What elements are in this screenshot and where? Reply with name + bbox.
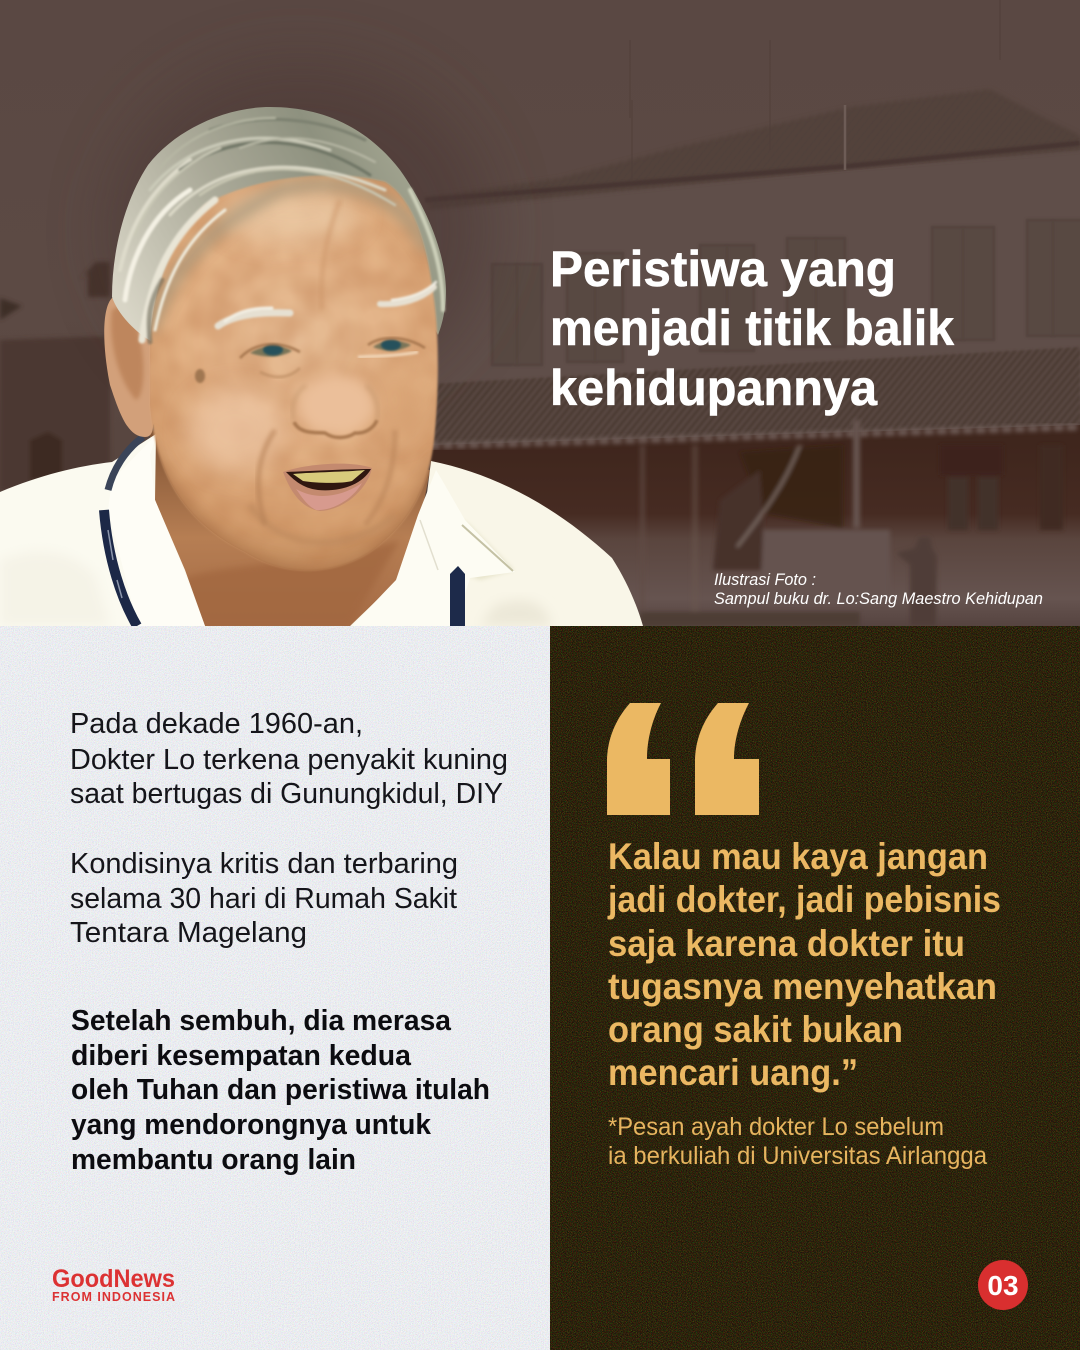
left distant building: [0, 262, 110, 500]
building roof: [425, 89, 1080, 210]
text block: bold conclusion: oleh Tuhan dan peristiwa itulah: [71, 1074, 490, 1106]
quote text: mencari uang.”: [608, 1052, 858, 1093]
quote attribution: ia berkuliah di Universitas Airlangga: [608, 1142, 987, 1170]
mouth: [283, 464, 372, 511]
logo: GoodNews from Indonesia: [52, 1265, 175, 1304]
quote text: tugasnya menyehatkan: [608, 966, 997, 1007]
title: Peristiwa yang: [550, 241, 896, 297]
shirt left: [0, 434, 205, 626]
shirt right: [350, 461, 643, 626]
title: menjadi titik balik: [550, 300, 954, 356]
nose: [293, 375, 378, 438]
text block: first paragraph: Pada dekade 1960-an,: [70, 708, 363, 740]
title: [550, 241, 954, 416]
text block: bold conclusion: diberi kesempatan kedua: [71, 1040, 412, 1072]
tile band: [430, 347, 1080, 445]
hair: [112, 107, 446, 350]
text block: second paragraph: Tentara Magelang: [70, 917, 307, 949]
quote text: saja karena dokter itu: [608, 923, 965, 964]
quote attribution: [608, 1113, 987, 1170]
forehead highlight: [220, 187, 360, 243]
columns, canopy, figure: [640, 420, 1063, 626]
text block: second paragraph: [70, 848, 458, 949]
photo credit caption: Sampul buku dr. Lo:Sang Maestro Kehidupan: [714, 590, 1043, 608]
panel: hero photo background: [0, 0, 1080, 626]
page number badge: [978, 1260, 1028, 1310]
ear: [104, 296, 170, 437]
quote text: orang sakit bukan: [608, 1009, 903, 1050]
text block: first paragraph: [70, 708, 508, 810]
page number badge: 03: [987, 1270, 1019, 1301]
dark glow behind head: [110, 60, 490, 400]
quote text: jadi dokter, jadi pebisnis: [607, 879, 1001, 920]
text block: second paragraph: Kondisinya kritis dan terbaring: [70, 848, 458, 880]
neck: [150, 430, 430, 626]
panel: left story panel: [0, 626, 550, 1350]
text block: bold conclusion: membantu orang lain: [71, 1144, 356, 1176]
logo: GoodNews from Indonesia: GoodNews: [52, 1265, 175, 1293]
lower storey: [430, 425, 1080, 626]
text block: first paragraph: Dokter Lo terkena penyakit kuning: [70, 744, 508, 776]
quote text: [607, 836, 1001, 1093]
text block: bold conclusion: Setelah sembuh, dia merasa: [71, 1005, 452, 1037]
panel: right quote panel: [550, 626, 1080, 1350]
text block: first paragraph: saat bertugas di Gunungkidul, DIY: [70, 778, 503, 810]
lanyard left: [104, 510, 137, 626]
photo credit caption: [714, 571, 1043, 608]
text block: second paragraph: selama 30 hari di Rumah Sakit: [70, 883, 457, 915]
photo: portrait of Dokter Lo: [0, 107, 643, 626]
title: kehidupannya: [550, 360, 878, 416]
lanyard right: [450, 566, 465, 626]
face: [150, 176, 438, 570]
hair strands: [120, 118, 443, 342]
text block: bold conclusion: [71, 1005, 490, 1176]
quote attribution: *Pesan ayah dokter Lo sebelum: [608, 1113, 944, 1141]
building wall: [430, 150, 1080, 440]
icon: opening quotation marks: [607, 703, 759, 815]
quote text: Kalau mau kaya jangan: [608, 836, 988, 877]
text block: bold conclusion: yang mendorongnya untuk: [71, 1109, 432, 1141]
photo credit caption: Ilustrasi Foto :: [714, 571, 816, 589]
brows: [218, 282, 436, 326]
logo: GoodNews from Indonesia: FROM INDONESIA: [52, 1290, 175, 1304]
skin shading: [150, 176, 437, 570]
eyes: [195, 338, 425, 383]
